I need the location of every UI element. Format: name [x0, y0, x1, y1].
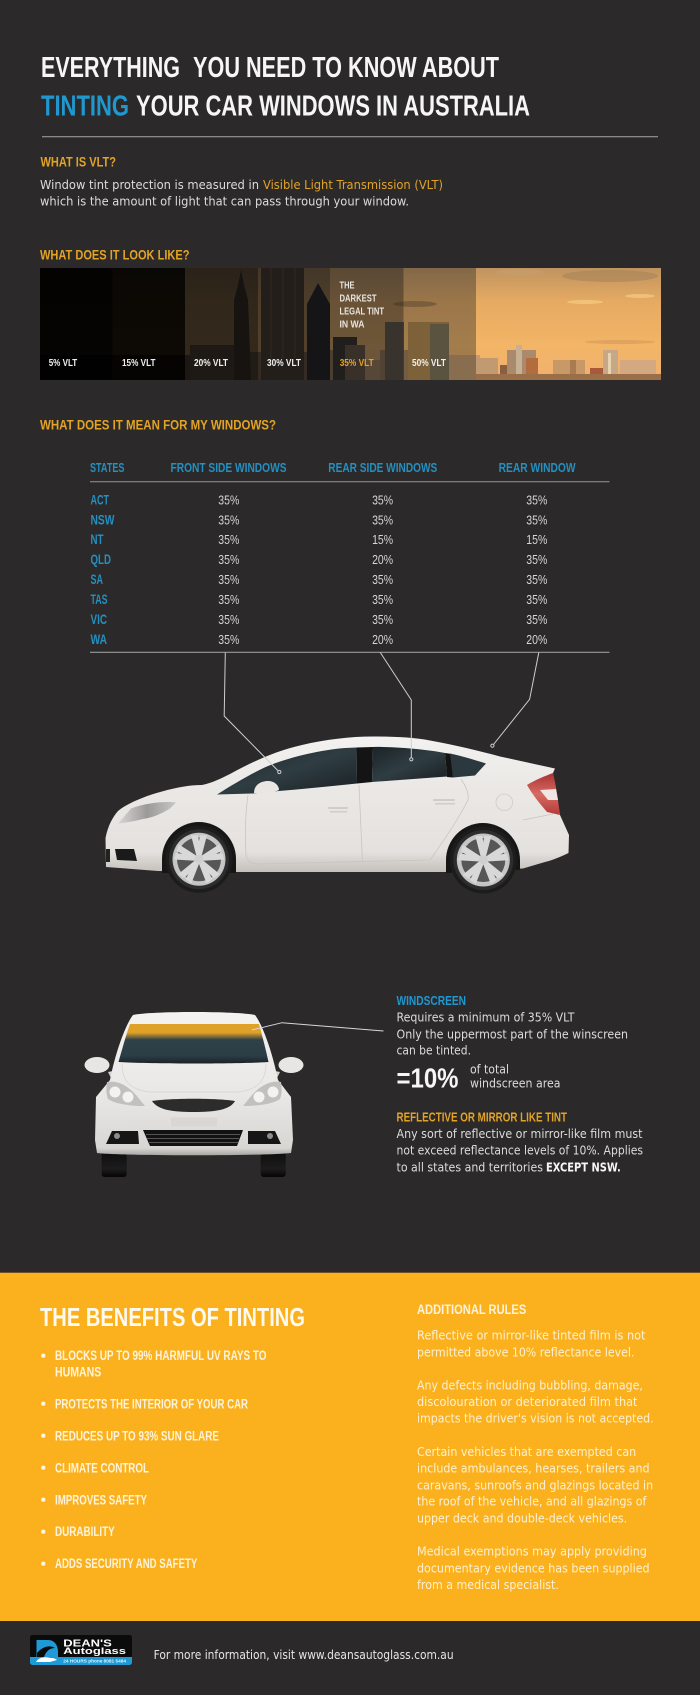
callout: darkest legal tint	[340, 280, 384, 331]
door outlines	[245, 779, 553, 864]
VLT labels: 5% VLT	[49, 357, 78, 369]
fuel cap	[496, 794, 513, 811]
text block: additional rules: Certain vehicles that are exempted can	[417, 1445, 636, 1459]
footer text: For more information, visit www.deansautoglass.com.au	[154, 1648, 454, 1662]
benefits list: PROTECTS THE INTERIOR OF YOUR CAR	[55, 1396, 248, 1411]
rear side window values: 35%	[372, 492, 393, 507]
text block: windscreen: Only the uppermost part of the winscreen	[396, 1027, 628, 1041]
heading: benefits of tinting: THE BENEFITS OF TINTING	[40, 1302, 305, 1332]
rear side window values: 35%	[372, 592, 393, 607]
number plate	[171, 1118, 217, 1126]
callout: darkest legal tint: DARKEST	[340, 293, 377, 305]
text block: additional rules: the roof of the vehicle, and all glazings of	[417, 1495, 647, 1509]
rear window values: 35%	[526, 572, 548, 587]
heading: what is VLT: WHAT IS VLT?	[40, 155, 116, 170]
text block: additional rules: caravans, sunroofs and glazings located in	[417, 1478, 653, 1492]
table header: FRONT SIDE WINDOWS	[170, 461, 286, 475]
heading: what does it mean: WHAT DOES IT MEAN FOR MY WINDOWS?	[40, 417, 276, 432]
state column	[90, 492, 115, 647]
front wheel	[162, 822, 236, 893]
callout: darkest legal tint: LEGAL TINT	[340, 306, 384, 318]
arrow: rear window callout	[491, 652, 539, 747]
text block: VLT definition: which is the amount of light that can pass through your window.	[40, 194, 409, 208]
state column: WA	[90, 632, 107, 647]
front side window values: 35%	[218, 572, 240, 587]
body	[95, 1012, 293, 1155]
rear window values: 35%	[526, 492, 548, 507]
table: tint limits by state	[90, 461, 610, 653]
VLT labels: 35% VLT	[340, 357, 374, 369]
stat: 10 percent: of total	[470, 1062, 509, 1076]
rear window values: 35%	[526, 592, 548, 607]
rear side window values: 15%	[372, 532, 393, 547]
rear window values: 20%	[526, 632, 548, 647]
door handles	[328, 799, 455, 812]
rear window values: 15%	[526, 532, 548, 547]
text block: additional rules: permitted above 10% reflectance level.	[417, 1345, 634, 1359]
tail light	[527, 773, 560, 815]
text block: reflective tint: Any sort of reflective or mirror-like film must	[396, 1127, 643, 1141]
title: EVERYTHING	[41, 52, 180, 84]
VLT labels: 50% VLT	[412, 357, 446, 369]
hood line	[122, 1064, 266, 1092]
table header: STATES	[90, 461, 124, 475]
front side window values: 35%	[218, 532, 240, 547]
text block: additional rules: impacts the driver's vision is not accepted.	[417, 1412, 654, 1426]
table header	[90, 461, 576, 475]
arrow: rear side windows callout	[380, 652, 413, 761]
state column: QLD	[90, 552, 111, 567]
arrow: front side windows callout	[224, 652, 281, 774]
icon: white sedan side view	[106, 736, 569, 894]
benefits list: ADDS SECURITY AND SAFETY	[55, 1556, 197, 1571]
text block: additional rules	[417, 1329, 654, 1592]
text block: VLT definition: Visible Light Transmission (VLT)	[263, 178, 443, 192]
state column: TAS	[90, 592, 108, 607]
text block: windscreen	[396, 994, 628, 1093]
headlight	[118, 802, 176, 824]
state column: VIC	[90, 612, 107, 627]
front side window values: 35%	[218, 592, 240, 607]
panel: yellow benefits section	[0, 1273, 700, 1621]
front side window values: 35%	[218, 612, 240, 627]
arrow: windscreen callout	[252, 1023, 384, 1031]
wing mirror	[254, 781, 279, 793]
rear quarter glass	[450, 754, 486, 778]
text block: additional rules: discolouration or deteriorated film that	[417, 1395, 638, 1409]
rear window values: 35%	[526, 552, 548, 567]
stat: 10 percent: windscreen area	[470, 1076, 560, 1090]
state column: ACT	[90, 492, 109, 507]
stat: 10 percent: =10%	[396, 1062, 458, 1093]
logo: Dean's Autoglass: Autoglass	[63, 1646, 126, 1657]
text block: additional rules: include ambulances, hearses, trailers and	[417, 1462, 650, 1476]
rear window values: 35%	[526, 512, 548, 527]
car body	[106, 736, 569, 872]
table header: REAR WINDOW	[499, 461, 576, 475]
VLT labels	[49, 357, 446, 369]
heading: windscreen: WINDSCREEN	[396, 994, 466, 1008]
rear side glass	[372, 747, 447, 782]
logo: Dean's Autoglass: DEAN'S	[63, 1639, 112, 1650]
text block: additional rules: Any defects including bubbling, damage,	[417, 1378, 643, 1392]
heading: what does it look like: WHAT DOES IT LOOK LIKE?	[40, 248, 190, 263]
logo: Dean's Autoglass	[30, 1635, 132, 1665]
rear side window values: 20%	[372, 552, 393, 567]
heading: reflective tint: REFLECTIVE OR MIRROR LIKE TINT	[396, 1111, 567, 1125]
door pillar	[356, 747, 373, 784]
rear side window values: 35%	[372, 572, 393, 587]
heading: additional rules: ADDITIONAL RULES	[417, 1302, 526, 1317]
headlights	[106, 1082, 282, 1106]
callout: darkest legal tint: THE	[340, 280, 354, 292]
VLT labels: 15% VLT	[122, 357, 156, 369]
stat: 10 percent	[396, 1062, 560, 1093]
front side window values: 35%	[218, 632, 240, 647]
VLT labels: 30% VLT	[267, 357, 301, 369]
text block: VLT definition: Window tint protection is measured in	[40, 178, 259, 192]
benefits list: DURABILITY	[55, 1524, 115, 1539]
state column: SA	[90, 572, 103, 587]
mirrors	[84, 1057, 304, 1080]
text block: additional rules: upper deck and double-deck vehicles.	[417, 1511, 627, 1525]
windscreen with tinted band	[118, 1024, 268, 1064]
text block: reflective tint: not exceed reflectance levels of 10%. Applies	[396, 1144, 643, 1158]
rear side window values: 35%	[372, 612, 393, 627]
state column: NSW	[90, 512, 115, 527]
text block: additional rules: documentary evidence has been supplied	[417, 1561, 650, 1575]
text block: windscreen: can be tinted.	[396, 1044, 471, 1058]
callout: darkest legal tint: IN WA	[340, 319, 365, 331]
front side window values: 35%	[218, 512, 240, 527]
tyres	[102, 1150, 286, 1177]
fog lamp	[115, 849, 137, 861]
table header: REAR SIDE WINDOWS	[328, 461, 437, 475]
benefits list: HUMANS	[55, 1364, 101, 1379]
benefits list: BLOCKS UP TO 99% HARMFUL UV RAYS TO	[55, 1348, 266, 1363]
rear wheel	[446, 823, 520, 894]
rear side window values: 35%	[372, 512, 393, 527]
state column: NT	[90, 532, 104, 547]
rear window values: 35%	[526, 612, 548, 627]
text block: VLT definition	[40, 178, 443, 208]
logo: Dean's Autoglass: 24 HOURS phone 8081 5484	[63, 1658, 127, 1664]
text block: additional rules: from a medical specialist.	[417, 1578, 559, 1592]
VLT labels: 20% VLT	[194, 357, 228, 369]
benefits list: CLIMATE CONTROL	[55, 1460, 149, 1475]
text block: reflective tint: EXCEPT NSW.	[546, 1160, 621, 1174]
front side window values: 35%	[218, 552, 240, 567]
text block: additional rules: Medical exemptions may apply providing	[417, 1545, 647, 1559]
rear window values	[526, 492, 548, 647]
panel: VLT skyline strip	[40, 268, 661, 380]
grille	[152, 1099, 235, 1112]
fog lamps	[106, 1131, 281, 1144]
lower grille	[143, 1130, 243, 1146]
title: TINTING	[41, 90, 129, 122]
text block: additional rules: Reflective or mirror-like tinted film is not	[417, 1329, 646, 1343]
benefits list: REDUCES UP TO 93% SUN GLARE	[55, 1428, 219, 1443]
front side window values	[218, 492, 240, 647]
benefits list: IMPROVES SAFETY	[55, 1492, 147, 1507]
rear side window values	[372, 492, 393, 647]
icon: white car front view	[84, 1012, 304, 1177]
front side window values: 35%	[218, 492, 240, 507]
front glass	[217, 748, 357, 794]
benefits list	[41, 1348, 266, 1571]
title: YOUR CAR WINDOWS IN AUSTRALIA	[136, 90, 530, 122]
rear pillar	[445, 753, 453, 778]
text block: reflective tint	[396, 1111, 643, 1174]
text block: windscreen: Requires a minimum of 35% VLT	[396, 1011, 575, 1025]
text block: reflective tint: to all states and territories	[396, 1160, 543, 1174]
section: what is VLT	[40, 155, 443, 208]
title: YOU NEED TO KNOW ABOUT	[193, 52, 499, 84]
title	[41, 52, 530, 122]
rear side window values: 20%	[372, 632, 393, 647]
